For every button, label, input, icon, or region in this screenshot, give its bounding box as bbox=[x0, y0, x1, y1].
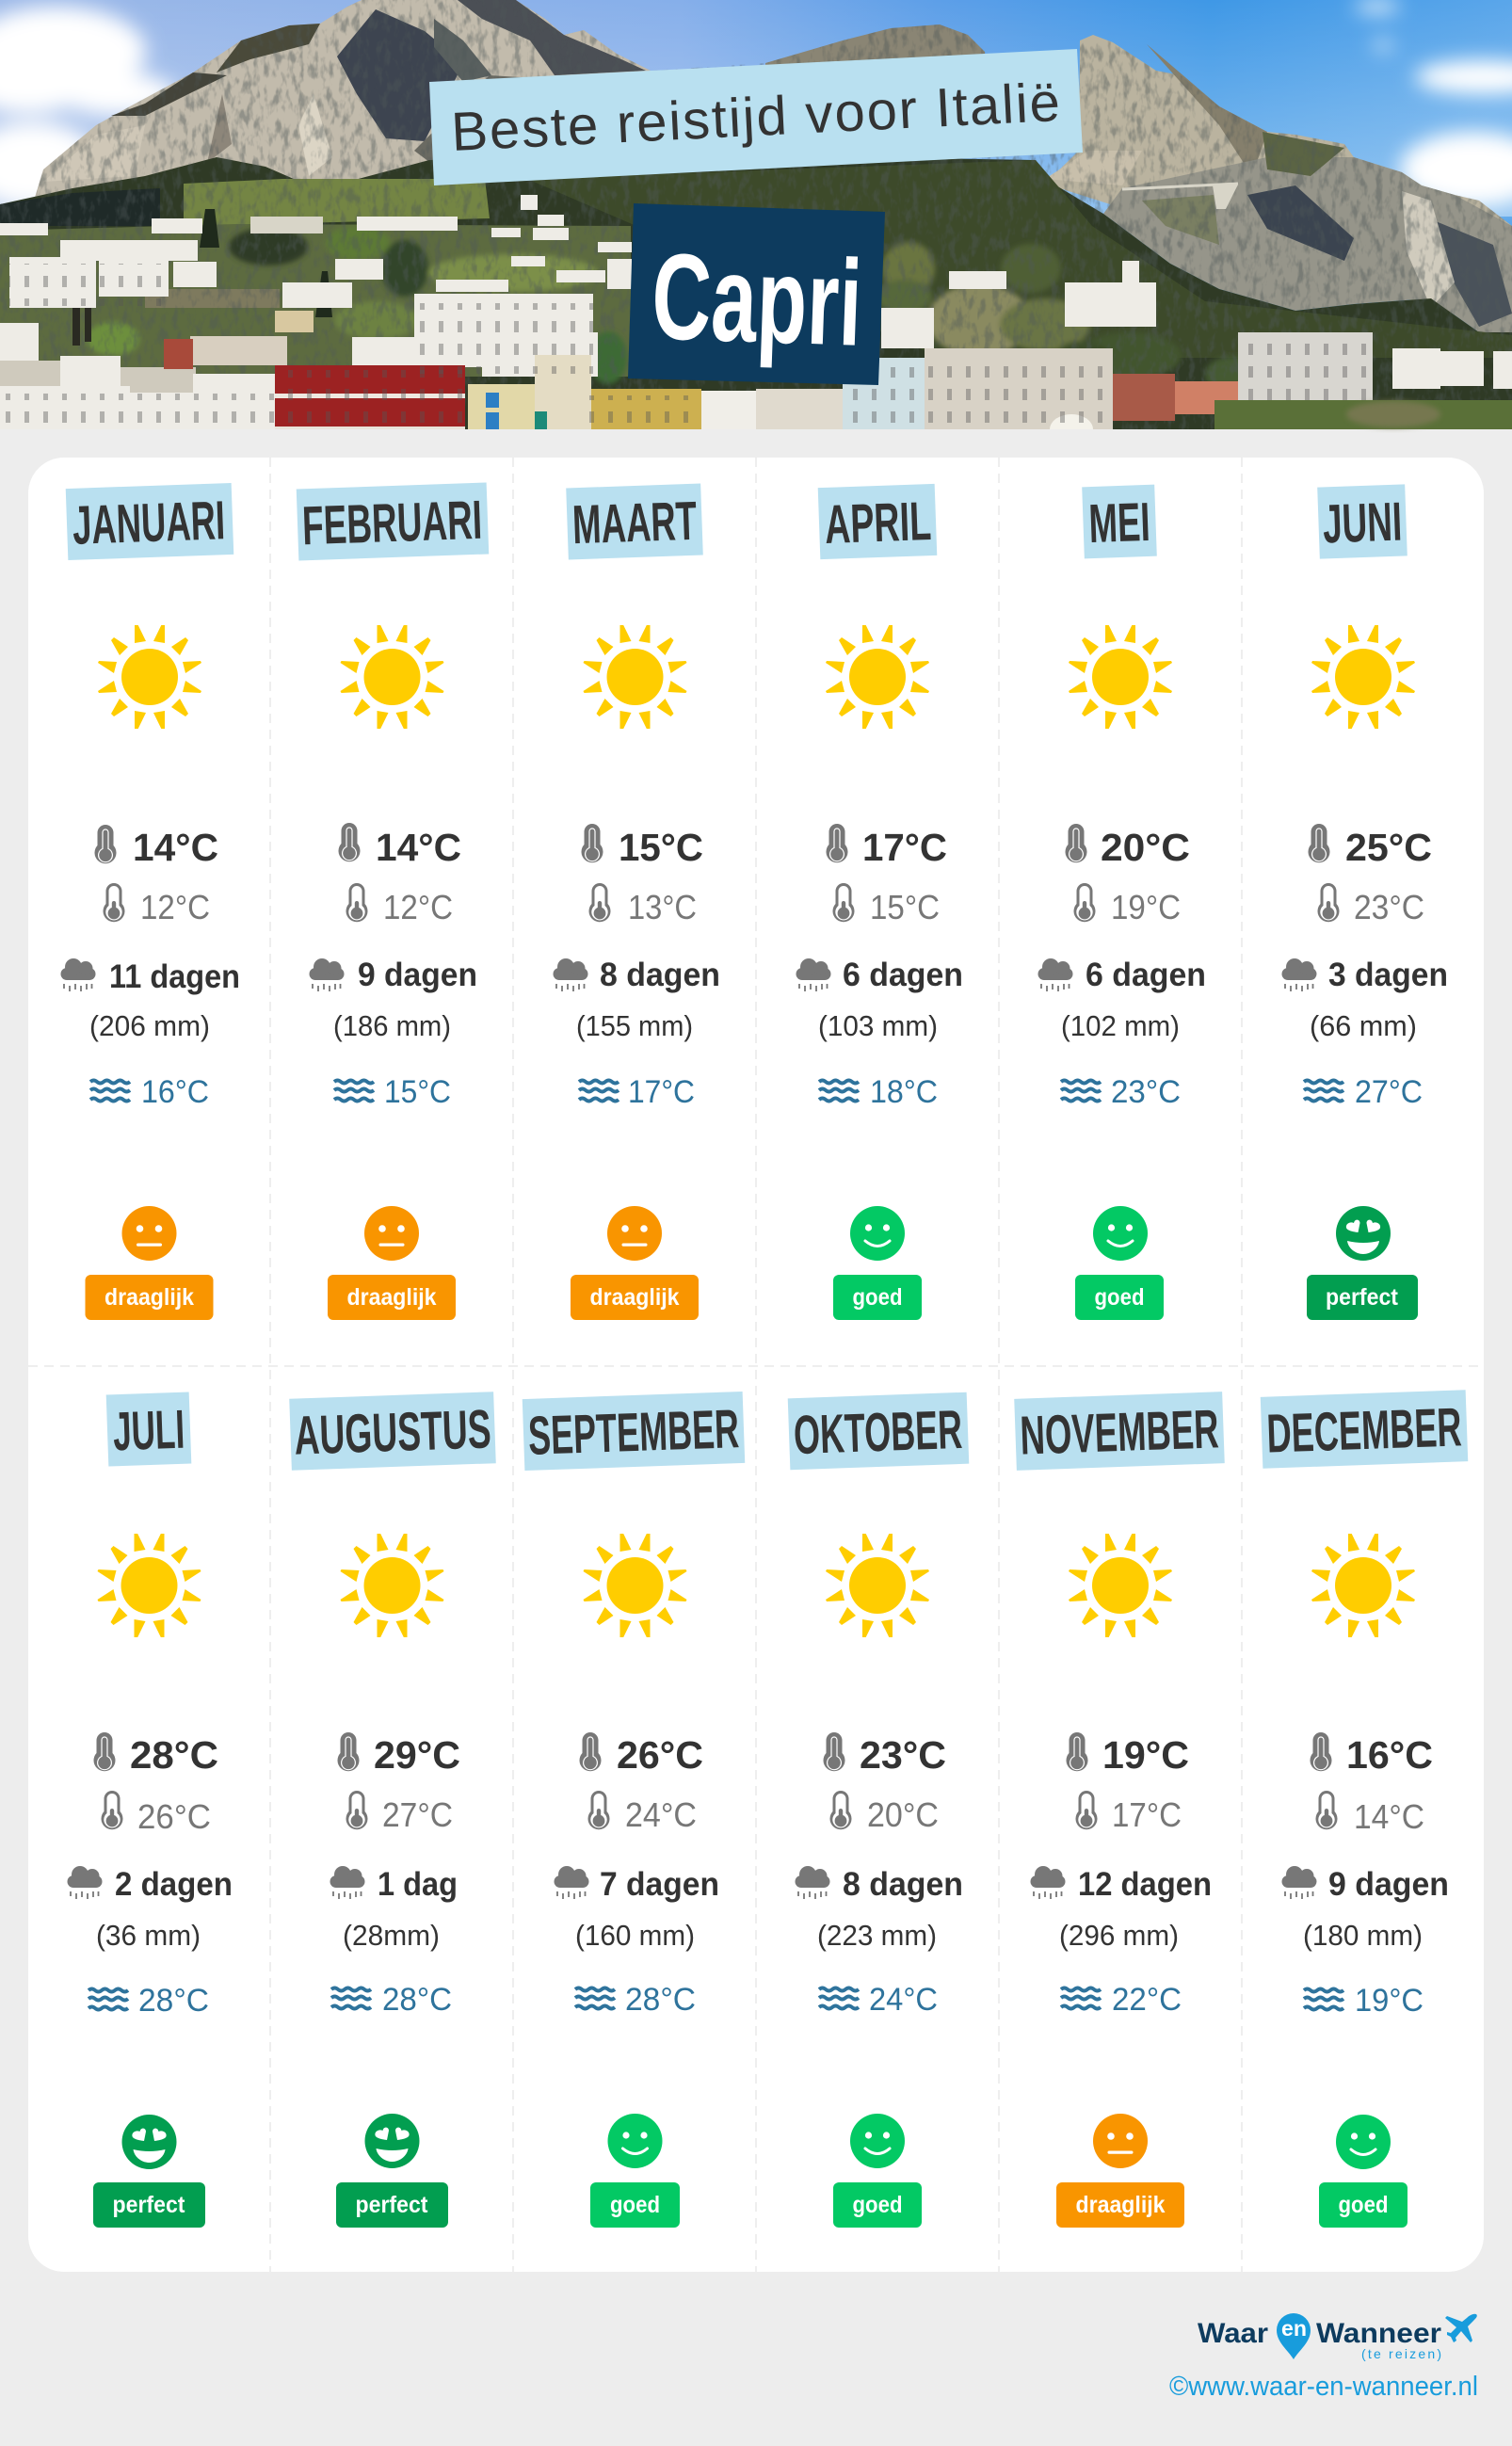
heading bbox=[818, 484, 937, 559]
rating: perfect bbox=[1307, 1206, 1418, 1320]
min temperature bbox=[1318, 883, 1424, 926]
max temperature bbox=[1309, 824, 1432, 869]
heading bbox=[566, 484, 703, 559]
max temperature: 15°C bbox=[619, 826, 703, 869]
rain days bbox=[1282, 957, 1448, 993]
month: mei bbox=[1037, 485, 1206, 1320]
min temperature bbox=[346, 883, 453, 926]
rainfall: (155 mm) bbox=[576, 1009, 693, 1042]
max temperature bbox=[337, 1732, 460, 1777]
max temperature: 14°C bbox=[133, 826, 218, 869]
max temperature bbox=[94, 1732, 218, 1777]
logo: Waar en Wanneer: (te reizen) bbox=[1361, 2346, 1441, 2361]
sea temperature bbox=[819, 1982, 938, 2018]
icon: sun bbox=[1069, 1534, 1172, 1637]
title banner: Beste reistijd voor Italië bbox=[450, 72, 1061, 163]
rainfall: (186 mm) bbox=[333, 1009, 451, 1042]
max temperature: 26°C bbox=[617, 1733, 703, 1777]
rating: goed: goed bbox=[610, 2192, 660, 2218]
max temperature bbox=[1066, 824, 1190, 869]
rain days: 2 dagen bbox=[115, 1866, 233, 1903]
rain days: 9 dagen bbox=[1328, 1866, 1449, 1903]
min temperature: 23°C bbox=[1354, 888, 1424, 926]
sea temperature: 18°C bbox=[870, 1074, 938, 1110]
rain days: 9 dagen bbox=[358, 957, 477, 993]
heading bbox=[106, 1392, 191, 1467]
rain days bbox=[330, 1866, 458, 1903]
min temperature: 12°C bbox=[140, 888, 210, 926]
rating: draaglijk: draaglijk bbox=[1075, 2192, 1166, 2218]
subtitle box: Capri bbox=[628, 203, 885, 385]
max temperature: 29°C bbox=[374, 1733, 460, 1777]
icon: airplane bbox=[1445, 2314, 1477, 2342]
rain days: 3 dagen bbox=[1328, 957, 1448, 993]
min temperature: 17°C bbox=[1112, 1795, 1182, 1834]
min temperature bbox=[102, 1791, 211, 1836]
month: februari bbox=[297, 482, 489, 1320]
sea temperature: 22°C bbox=[1112, 1982, 1182, 2018]
icon: sun bbox=[584, 625, 687, 729]
rating: perfect bbox=[336, 2114, 448, 2228]
rain days: 8 dagen bbox=[843, 1866, 963, 1903]
heading: JULI bbox=[112, 1399, 185, 1462]
sea temperature bbox=[331, 1982, 452, 2018]
month: juni bbox=[1282, 484, 1448, 1320]
rating: goed bbox=[1319, 2115, 1407, 2228]
rating: perfect: perfect bbox=[356, 2192, 428, 2218]
month: december bbox=[1261, 1390, 1468, 2228]
rain days: 1 dag bbox=[378, 1866, 458, 1903]
min temperature: 20°C bbox=[867, 1795, 939, 1834]
sea temperature: 17°C bbox=[628, 1074, 695, 1110]
sea temperature bbox=[819, 1074, 938, 1110]
sea temperature bbox=[575, 1982, 696, 2018]
max temperature: 14°C bbox=[376, 826, 461, 869]
min temperature bbox=[1075, 1791, 1182, 1834]
sea temperature: 27°C bbox=[1355, 1074, 1423, 1110]
rainfall: (180 mm) bbox=[1303, 1919, 1423, 1952]
rating: draaglijk bbox=[1056, 2114, 1184, 2228]
sea temperature bbox=[88, 1983, 209, 2019]
rating: goed: goed bbox=[1094, 1284, 1145, 1311]
sea temperature: 28°C bbox=[382, 1982, 452, 2018]
min temperature: 15°C bbox=[870, 888, 940, 926]
month: april bbox=[796, 484, 963, 1320]
rating: draaglijk bbox=[328, 1206, 456, 1320]
icon: sun bbox=[341, 625, 444, 729]
icon: sun bbox=[584, 1534, 687, 1637]
rating: goed bbox=[1075, 1206, 1164, 1320]
heading bbox=[66, 483, 233, 560]
icon: sun bbox=[98, 1534, 201, 1637]
heading bbox=[1082, 485, 1157, 558]
sea temperature bbox=[579, 1074, 695, 1110]
rainfall: (36 mm) bbox=[96, 1919, 201, 1952]
rating: goed: goed bbox=[853, 2192, 902, 2218]
heading: MEI bbox=[1087, 491, 1151, 555]
sea temperature bbox=[1304, 1074, 1423, 1110]
rain days: 6 dagen bbox=[1086, 957, 1206, 993]
rating: goed bbox=[833, 1206, 922, 1320]
icon: map pin: en bbox=[1281, 2316, 1307, 2341]
heading: NOVEMBER bbox=[1019, 1398, 1220, 1467]
heading: SEPTEMBER bbox=[527, 1398, 740, 1467]
rain days bbox=[60, 958, 240, 995]
rain days: 11 dagen bbox=[109, 958, 240, 995]
heading: JUNI bbox=[1322, 491, 1403, 555]
max temperature bbox=[823, 1732, 946, 1777]
heading bbox=[788, 1392, 969, 1470]
rainfall: (223 mm) bbox=[817, 1919, 937, 1952]
rain days: 12 dagen bbox=[1078, 1866, 1212, 1903]
rain days: 6 dagen bbox=[843, 957, 963, 993]
rainfall: (66 mm) bbox=[1310, 1009, 1417, 1042]
sea temperature: 28°C bbox=[138, 1983, 209, 2019]
heading: OKTOBER bbox=[793, 1399, 963, 1466]
rain days bbox=[68, 1866, 233, 1903]
max temperature: 16°C bbox=[1346, 1733, 1433, 1777]
month: maart bbox=[554, 484, 720, 1320]
icon: sun bbox=[341, 1534, 444, 1637]
max temperature bbox=[339, 823, 461, 869]
max temperature bbox=[580, 1732, 703, 1777]
sea temperature: 19°C bbox=[1355, 1983, 1424, 2019]
rating: goed bbox=[833, 2114, 922, 2228]
rating: draaglijk bbox=[571, 1206, 699, 1320]
max temperature bbox=[582, 824, 703, 869]
rating: draaglijk: draaglijk bbox=[105, 1284, 194, 1311]
min temperature bbox=[589, 883, 697, 926]
logo: Waar en Wanneer: Waar bbox=[1198, 2318, 1268, 2349]
month: juli bbox=[68, 1392, 233, 2228]
month: oktober bbox=[788, 1392, 969, 2228]
month: januari bbox=[60, 483, 240, 1320]
rating: goed: goed bbox=[853, 1284, 902, 1311]
max temperature: 17°C bbox=[862, 826, 947, 869]
icon: sun bbox=[1311, 625, 1415, 729]
sea temperature: 24°C bbox=[869, 1982, 938, 2018]
min temperature: 26°C bbox=[137, 1797, 211, 1836]
sea temperature bbox=[1304, 1983, 1424, 2019]
min temperature bbox=[1316, 1791, 1424, 1836]
heading bbox=[1014, 1392, 1225, 1471]
rating: goed: goed bbox=[1339, 2192, 1388, 2218]
icon: sun bbox=[98, 625, 201, 729]
min temperature bbox=[1073, 883, 1181, 926]
sea temperature: 16°C bbox=[141, 1074, 209, 1110]
min temperature: 24°C bbox=[625, 1795, 697, 1834]
month: november bbox=[1014, 1392, 1225, 2228]
max temperature bbox=[1066, 1732, 1189, 1777]
rainfall: (28mm) bbox=[343, 1919, 440, 1952]
sea temperature: 28°C bbox=[625, 1982, 696, 2018]
heading bbox=[297, 482, 489, 561]
sea temperature bbox=[334, 1074, 451, 1110]
max temperature bbox=[94, 825, 218, 869]
rating: perfect bbox=[93, 2115, 205, 2228]
max temperature: 28°C bbox=[130, 1733, 218, 1777]
icon: sun bbox=[826, 1534, 929, 1637]
header photo: Capri mountains and town bbox=[0, 0, 1512, 429]
heading bbox=[289, 1392, 496, 1471]
website url: ©www.waar-en-wanneer.nl bbox=[1169, 2372, 1478, 2402]
max temperature: 20°C bbox=[1101, 826, 1190, 869]
heading bbox=[1317, 484, 1407, 559]
max temperature bbox=[1311, 1732, 1433, 1777]
max temperature: 19°C bbox=[1102, 1733, 1189, 1777]
rating: draaglijk: draaglijk bbox=[589, 1284, 680, 1311]
rain days bbox=[309, 957, 477, 993]
heading bbox=[523, 1392, 745, 1471]
title banner bbox=[429, 49, 1083, 185]
min temperature bbox=[587, 1791, 697, 1834]
max temperature: 23°C bbox=[860, 1733, 946, 1777]
sea temperature bbox=[1061, 1074, 1181, 1110]
panel: climate table card bbox=[28, 458, 1484, 2272]
min temperature bbox=[104, 883, 210, 926]
rainfall: (206 mm) bbox=[89, 1009, 210, 1042]
heading: JANUARI bbox=[72, 490, 226, 556]
rainfall: (103 mm) bbox=[818, 1009, 938, 1042]
sea temperature bbox=[90, 1074, 209, 1110]
min temperature: 27°C bbox=[382, 1795, 453, 1834]
subtitle box: Capri: Capri bbox=[650, 227, 864, 372]
icon: map pin bbox=[1277, 2313, 1311, 2359]
rating: draaglijk: draaglijk bbox=[346, 1284, 437, 1311]
rainfall: (102 mm) bbox=[1061, 1009, 1180, 1042]
min temperature: 13°C bbox=[628, 888, 697, 926]
min temperature: 12°C bbox=[383, 888, 453, 926]
sea temperature: 15°C bbox=[384, 1074, 451, 1110]
sea temperature bbox=[1061, 1982, 1182, 2018]
heading: APRIL bbox=[824, 491, 932, 555]
rating: perfect: perfect bbox=[113, 2192, 185, 2218]
min temperature: 14°C bbox=[1354, 1797, 1424, 1836]
rainfall: (296 mm) bbox=[1059, 1919, 1179, 1952]
max temperature bbox=[827, 824, 947, 869]
min temperature bbox=[832, 883, 940, 926]
rainfall: (160 mm) bbox=[575, 1919, 695, 1952]
min temperature bbox=[346, 1791, 453, 1834]
icon: sun bbox=[1069, 625, 1172, 729]
month: september bbox=[523, 1392, 745, 2228]
min temperature: 19°C bbox=[1111, 888, 1181, 926]
rain days: 7 dagen bbox=[600, 1866, 719, 1903]
icon: sun bbox=[1311, 1534, 1415, 1637]
rating: goed bbox=[590, 2114, 680, 2228]
rating: perfect: perfect bbox=[1326, 1284, 1399, 1311]
rain days: 8 dagen bbox=[600, 957, 720, 993]
heading: FEBRUARI bbox=[301, 490, 483, 556]
icon: sun bbox=[826, 625, 929, 729]
logo: Waar en Wanneer bbox=[1198, 2313, 1477, 2361]
logo: Waar en Wanneer: Wanneer bbox=[1316, 2318, 1441, 2349]
sea temperature: 23°C bbox=[1111, 1074, 1181, 1110]
rating: draaglijk bbox=[85, 1206, 213, 1320]
month: augustus bbox=[289, 1392, 496, 2228]
heading: AUGUSTUS bbox=[293, 1398, 492, 1467]
max temperature: 25°C bbox=[1345, 826, 1432, 869]
heading: MAART bbox=[571, 491, 698, 555]
min temperature bbox=[830, 1791, 939, 1834]
